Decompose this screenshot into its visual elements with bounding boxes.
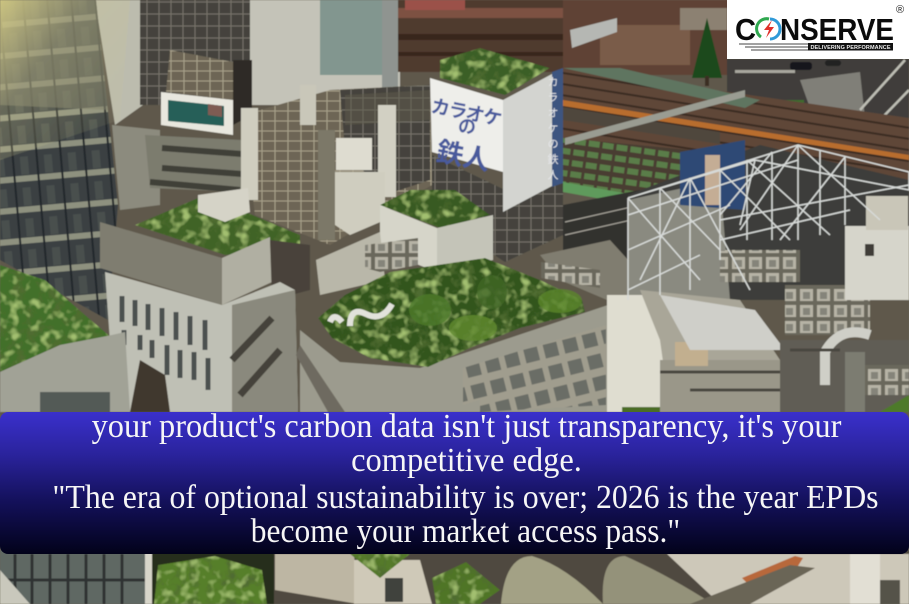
rooftop billboard and mid building <box>112 50 252 210</box>
street tree <box>692 18 722 86</box>
billboard lettering <box>429 91 505 178</box>
registered mark: ® <box>896 4 904 16</box>
wordmark: C <box>735 12 756 47</box>
icon: recycling lightning bolt <box>757 19 780 39</box>
main green roof <box>318 258 585 367</box>
green roof on grey box <box>100 188 310 305</box>
lower band of buildings <box>0 550 909 604</box>
text line 2: competitive edge. <box>351 442 582 479</box>
callout panel <box>0 412 909 554</box>
karaoke billboard <box>429 48 563 262</box>
text line 3: "The era of optional sustainability is over; 2026 is the year EPDs <box>52 479 879 516</box>
logo badge: NSERVE <box>780 12 894 47</box>
street and crossings top right <box>727 59 909 134</box>
right side rooftop block <box>540 140 909 412</box>
white serpentine vents <box>330 304 392 326</box>
white office building left <box>105 272 298 412</box>
logo badge <box>727 0 909 59</box>
billboard lettering: 鉄人 <box>433 130 494 178</box>
tagline bar <box>739 43 893 51</box>
glass tower left <box>0 0 130 320</box>
billboard lettering: カラオケ <box>429 91 505 132</box>
scaffold tower <box>241 85 432 245</box>
left green rooftop <box>0 265 130 412</box>
white steel space frame <box>628 145 909 300</box>
upper background buildings <box>0 0 909 420</box>
railway tracks with orange train <box>563 68 909 295</box>
billboard side lettering: カラオケの鉄人 <box>545 76 561 180</box>
text line 4: become your market access pass." <box>251 513 680 550</box>
text line 1: your product's carbon data isn't just transparency, it's your <box>92 408 841 445</box>
billboard lettering: の <box>458 113 476 139</box>
tagline bar: DELIVERING PERFORMANCE <box>810 45 891 51</box>
mid green roof block <box>316 190 493 295</box>
building under main green roof <box>296 305 610 412</box>
